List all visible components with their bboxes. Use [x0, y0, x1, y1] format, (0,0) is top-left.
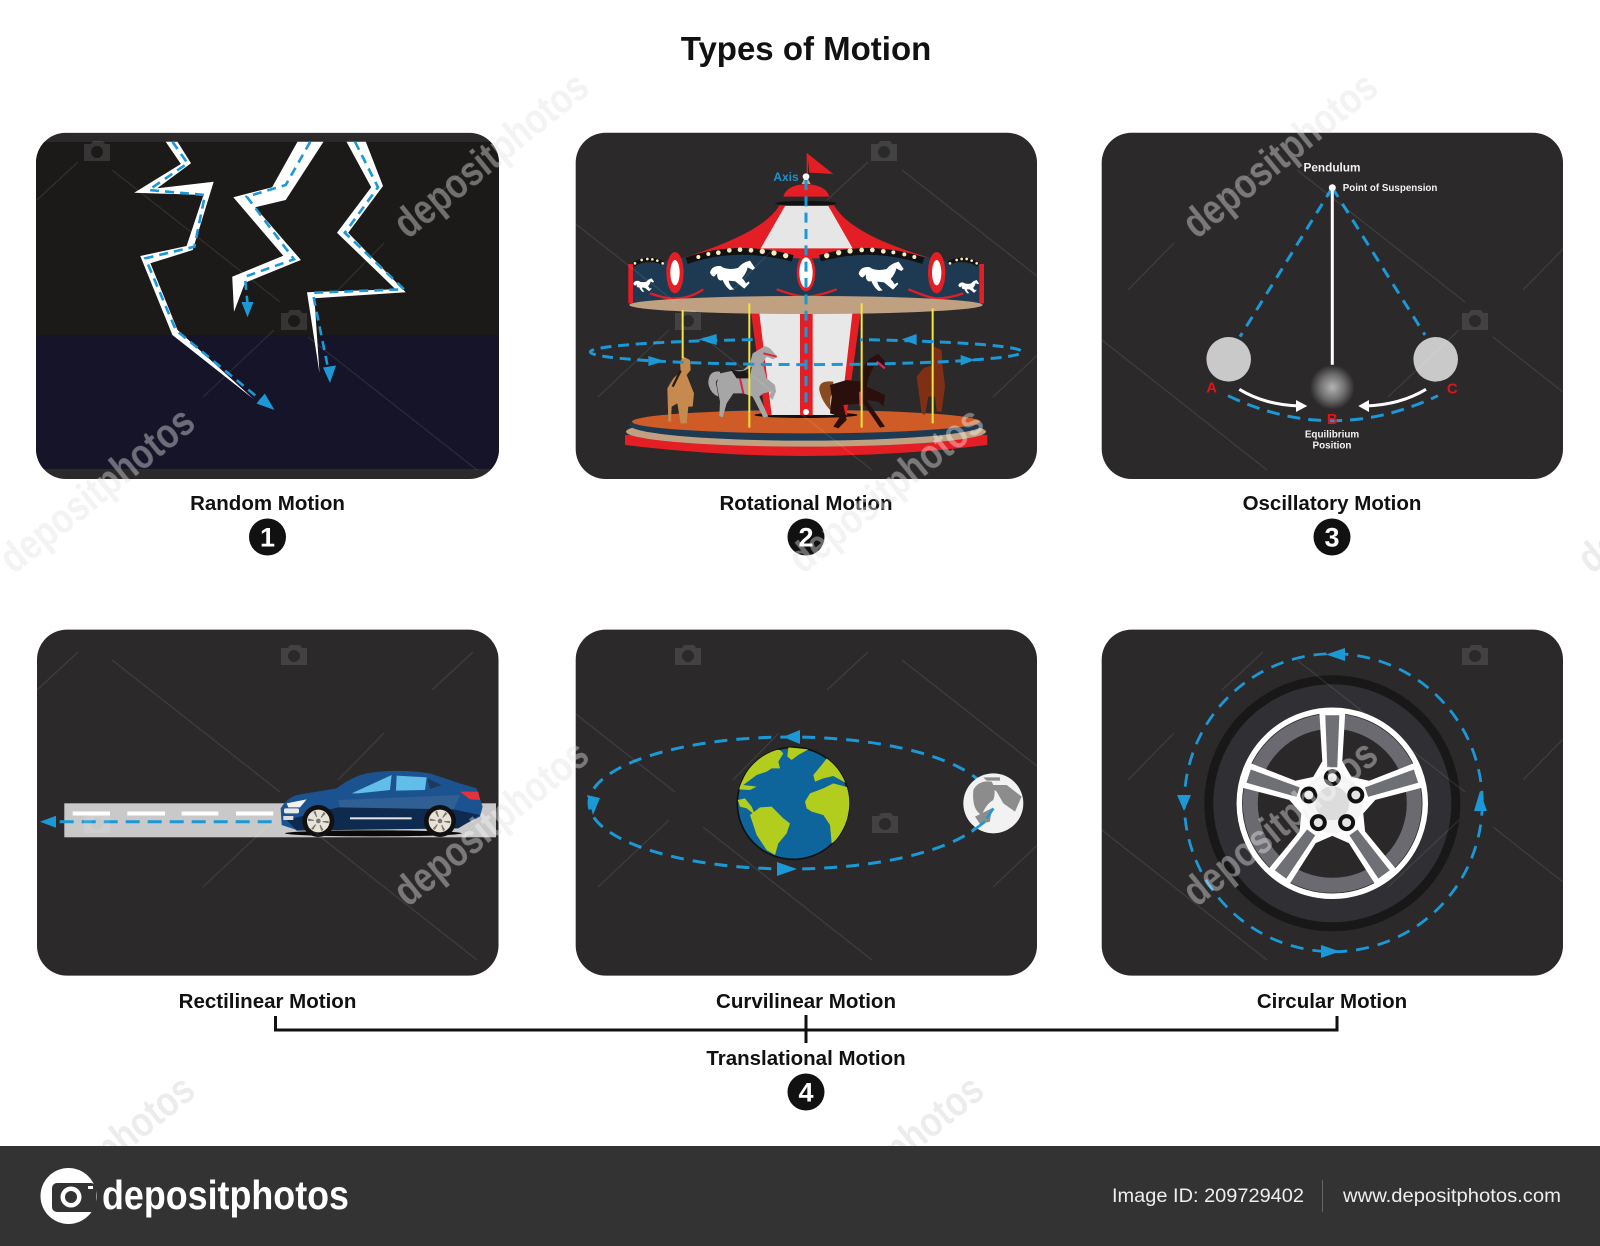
panel: random motion lightning [36, 133, 499, 479]
axis of rotation [773, 170, 809, 408]
number badge 2 [788, 518, 824, 556]
label: circular motion: Circular Motion [1257, 990, 1407, 1013]
label: translational motion: Translational Motion [706, 1047, 906, 1070]
horse: grey [708, 346, 777, 417]
carousel yellow poles [683, 303, 933, 428]
number badge 3 [1314, 518, 1350, 556]
watermark on white background: depositphotos [779, 397, 992, 582]
horse: brown [917, 347, 945, 415]
title: Types of Motion [681, 30, 931, 67]
watermark thin diagonal lines [37, 162, 1600, 960]
label pendulum: Pendulum [1303, 160, 1361, 174]
number badge 2: 2 [798, 522, 814, 552]
label: oscillatory motion: Oscillatory Motion [1243, 492, 1421, 515]
label equilibrium position [1305, 430, 1359, 452]
watermark overlay on panels [0, 62, 1386, 915]
panel: circular motion wheel [1102, 630, 1563, 976]
road [64, 803, 496, 837]
label point of suspension: Point of Suspension [1343, 183, 1437, 194]
number badge 1 [249, 518, 286, 556]
image id: Image ID: 209729402 [1112, 1185, 1304, 1207]
watermark overlay on panels: depositphotos [384, 62, 597, 247]
bob at position C [1413, 337, 1458, 382]
bracket joining translational types [276, 1015, 1337, 1043]
point of suspension [1329, 184, 1336, 191]
number badge 1: 1 [260, 522, 275, 552]
car [281, 771, 483, 837]
number badge 4 [788, 1074, 824, 1110]
watermark on white background: depositphotos [384, 62, 597, 247]
earth [737, 747, 850, 859]
panel: curvilinear motion earth and moon [576, 630, 1037, 976]
footer url: www.depositphotos.com [1342, 1185, 1561, 1207]
horse: dark [819, 354, 887, 428]
watermark on white background: depositphotos [1173, 62, 1386, 247]
bob at position B [1310, 365, 1355, 410]
label A: A [1206, 380, 1217, 396]
axis of rotation: Axis [773, 170, 799, 184]
watermark on white background: depositphotos [384, 730, 597, 915]
number badge 3: 3 [1324, 522, 1340, 552]
lightning bolt left [134, 142, 274, 410]
pendulum dashed swing lines [1228, 188, 1438, 421]
carousel roof [628, 153, 984, 305]
label: rectilinear motion: Rectilinear Motion [179, 990, 356, 1013]
wheel [1204, 675, 1460, 931]
label: curvilinear motion: Curvilinear Motion [716, 990, 896, 1013]
panel: rectilinear motion car [37, 630, 498, 976]
watermark overlay on panels: depositphotos [779, 397, 992, 582]
label: rotational motion: Rotational Motion [719, 492, 893, 515]
footer bar [0, 1146, 1600, 1246]
label B: B [1327, 411, 1338, 428]
carousel central column [750, 305, 862, 418]
moon [963, 773, 1023, 833]
lightning bolt right [307, 142, 406, 383]
watermark camera icons [84, 141, 1488, 833]
logo icon camera [40, 1168, 96, 1224]
pendulum string [1331, 188, 1334, 365]
watermark on white background: depositphotos [1173, 730, 1386, 915]
number badge 4: 4 [798, 1078, 814, 1108]
motion arrow left [1239, 389, 1307, 412]
panel: rotational motion carousel [576, 133, 1037, 479]
panel: oscillatory motion pendulum [1102, 133, 1563, 479]
watermark overlay on panels: depositphotos [1173, 730, 1386, 915]
watermark overlay on panels: depositphotos [384, 730, 597, 915]
frieze white horses [633, 261, 979, 293]
watermark on white background: depositphotos [779, 1065, 992, 1246]
circular dashed path [1177, 648, 1487, 958]
rotation dashed ellipse [590, 334, 1022, 366]
direction arrow [40, 816, 272, 828]
elliptical orbit [587, 730, 991, 876]
label: random motion: Random Motion [190, 492, 345, 515]
horse: tan [667, 357, 694, 423]
lightning bolt middle [232, 142, 324, 317]
bob at position A [1206, 337, 1251, 382]
label equilibrium position: Position [1313, 440, 1351, 452]
motion arrow right [1358, 389, 1426, 412]
watermark overlay on panels: depositphotos [1173, 62, 1386, 247]
label C: C [1447, 380, 1458, 398]
logo wordmark: depositphotos [102, 1172, 349, 1218]
carousel base platform [625, 409, 987, 456]
label equilibrium position: Equilibrium [1305, 430, 1359, 440]
